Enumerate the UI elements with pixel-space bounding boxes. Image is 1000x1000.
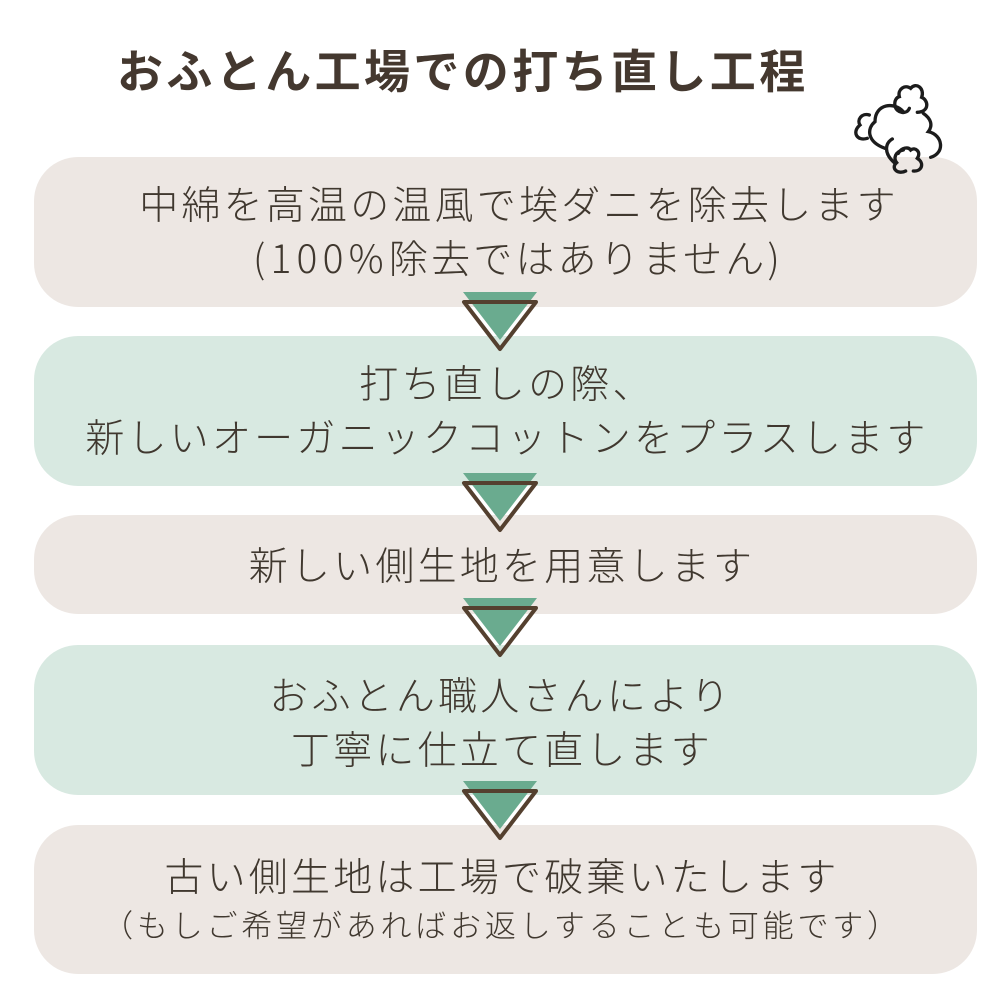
step 1 text: 中綿を高温の温風で埃ダニを除去します (139, 175, 899, 231)
step 4 text line 2: 丁寧に仕立て直します (291, 720, 713, 776)
step 2 text line 2: 新しいオーガニックコットンをプラスします (85, 408, 929, 464)
panel: step 4 (34, 645, 977, 795)
step 4 text line 1: おふとん職人さんにより (269, 666, 733, 722)
panel: step 2 (34, 336, 977, 486)
step 5 text: 古い側生地は工場で破棄いたします (164, 847, 840, 903)
step 1 note: (100%除去ではありません) (253, 229, 783, 285)
panel: step 1 (34, 157, 977, 307)
step 2 text line 1: 打ち直しの際、 (359, 354, 655, 410)
panel: step 5 (34, 825, 977, 974)
step 5 note: （もしご希望があればお返しすることも可能です） (102, 901, 902, 946)
title: おふとん工場での打ち直し工程 (117, 36, 809, 102)
step 3 text: 新しい側生地を用意します (249, 536, 755, 592)
panel: step 3 (34, 515, 977, 614)
